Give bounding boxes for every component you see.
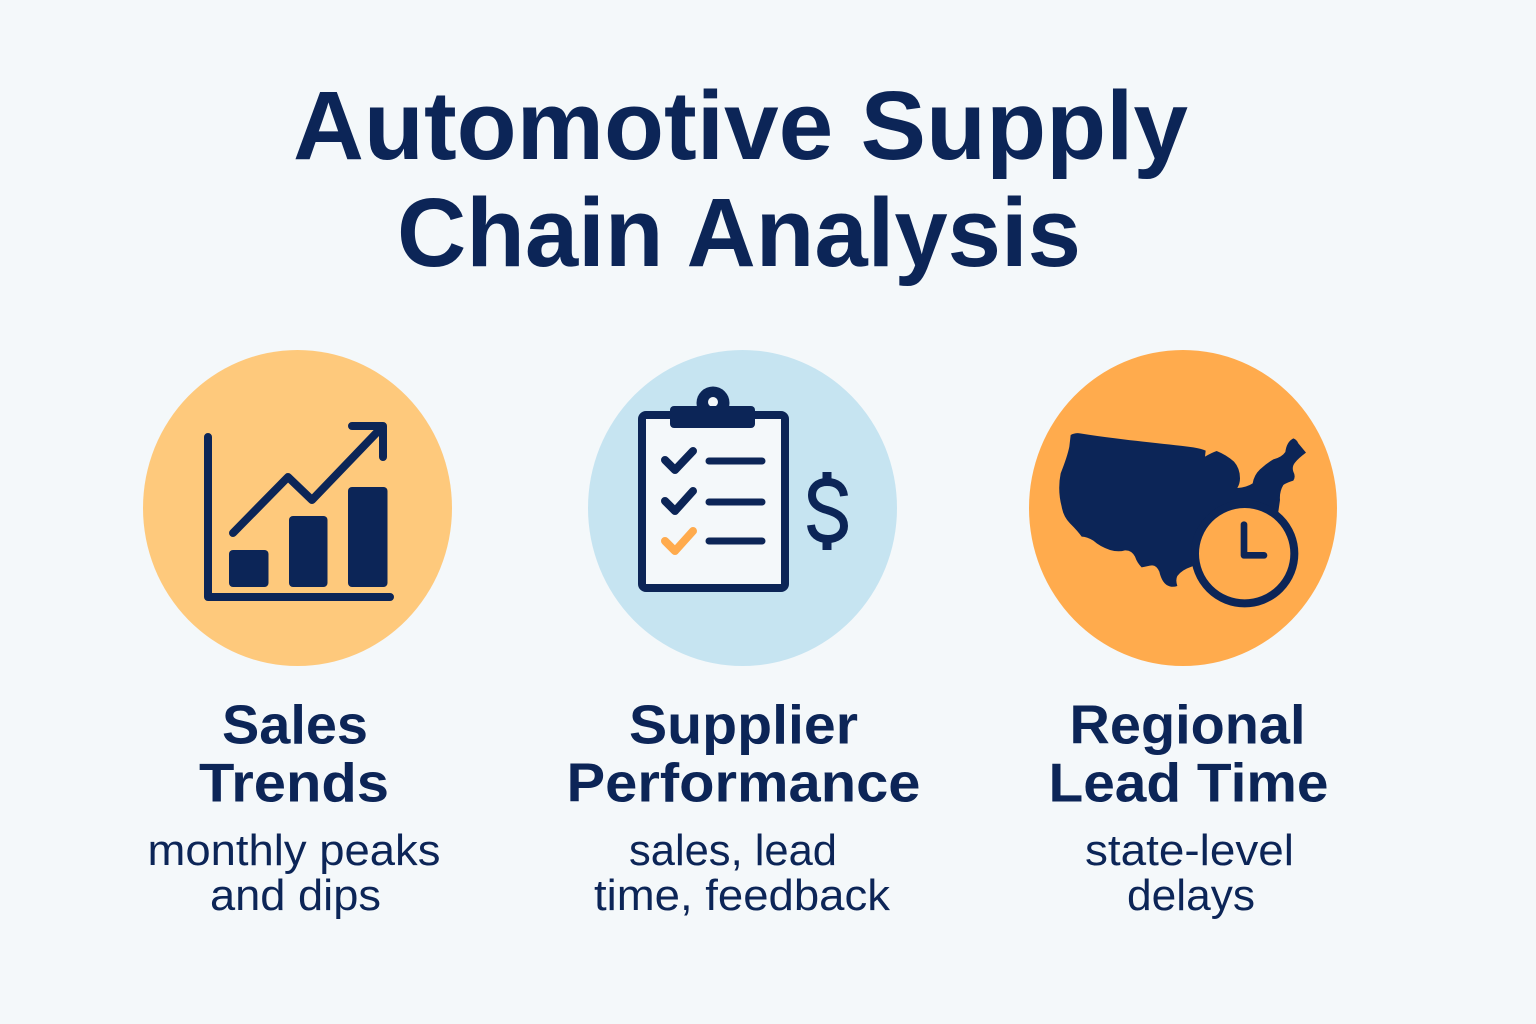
text: supplier performance description: time, feedback <box>594 871 891 920</box>
heading: regional lead time <box>1048 694 1328 814</box>
title: Chain Analysis <box>397 178 1081 287</box>
heading: supplier performance: Supplier <box>629 694 858 756</box>
text: sales trends description <box>148 826 440 920</box>
circle: sales trends background <box>143 350 452 666</box>
text: regional lead time description: delays <box>1127 871 1255 920</box>
icon: dollar sign <box>811 472 844 550</box>
panel: regional lead time <box>1029 350 1337 920</box>
text: sales trends description: monthly peaks <box>148 826 440 875</box>
text: supplier performance description: sales, lead <box>629 826 837 875</box>
heading: sales trends: Trends <box>199 752 389 814</box>
text: sales trends description: and dips <box>210 871 381 920</box>
heading: regional lead time: Regional <box>1070 694 1306 756</box>
circle: regional lead time background <box>1029 350 1337 666</box>
text: regional lead time description <box>1085 826 1294 920</box>
panel: supplier performance <box>566 350 920 920</box>
circle: supplier performance background <box>588 350 897 666</box>
heading: sales trends <box>199 694 389 814</box>
heading: supplier performance <box>566 694 920 814</box>
heading: sales trends: Sales <box>222 694 368 756</box>
panel: sales trends <box>143 350 452 920</box>
icon: clipboard checklist <box>642 386 785 588</box>
text: supplier performance description <box>594 826 891 920</box>
heading: supplier performance: Performance <box>566 752 920 814</box>
icon: bar chart with rising arrow <box>208 426 390 597</box>
title: Automotive Supply <box>293 71 1188 180</box>
icon: US map with clock <box>1059 433 1306 603</box>
text: regional lead time description: state-level <box>1085 826 1294 875</box>
title <box>293 71 1188 287</box>
heading: regional lead time: Lead Time <box>1048 752 1328 814</box>
